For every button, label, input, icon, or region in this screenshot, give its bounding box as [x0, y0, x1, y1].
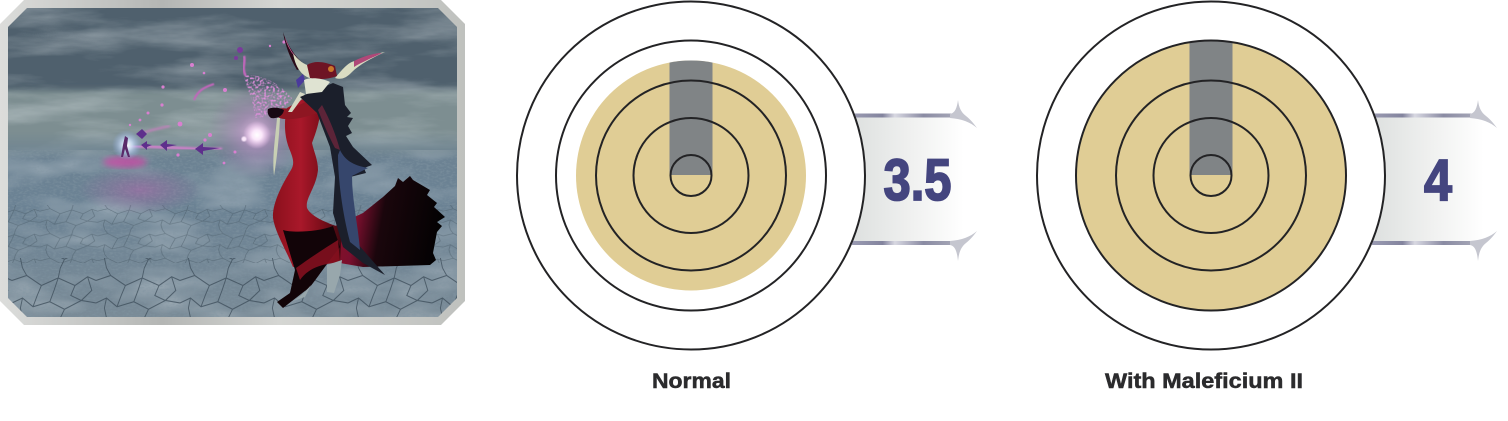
pink haze on ground — [96, 174, 184, 207]
game screenshot with metallic frame — [0, 0, 480, 325]
chart: normal range — [517, 2, 977, 393]
fur train — [333, 176, 445, 267]
bottom ornament — [852, 231, 977, 261]
tan range area — [1076, 40, 1346, 310]
chart: with Maleficium II — [1037, 2, 1497, 393]
distant target character — [103, 130, 147, 168]
value tab: normal — [848, 100, 977, 261]
feather cape — [300, 83, 385, 275]
white backing disc — [517, 2, 865, 350]
top ornament — [852, 100, 977, 128]
lower black hem — [277, 226, 340, 308]
value tab: with Maleficium II — [1368, 100, 1497, 261]
caption: With Maleficium II: With Maleficium II — [1105, 370, 1303, 393]
metallic octagonal frame — [0, 0, 465, 325]
grey blocked wedge — [670, 55, 712, 175]
stormy sky — [8, 8, 457, 154]
witch figure — [268, 32, 445, 308]
bottom ornament — [1372, 231, 1497, 261]
spell trail — [125, 40, 292, 164]
magic glow from the hand — [218, 98, 288, 165]
hand light flare — [244, 122, 270, 148]
caption: Normal: Normal — [652, 370, 731, 393]
top ornament — [1372, 100, 1497, 128]
tan range area — [576, 60, 806, 290]
legs — [327, 260, 342, 293]
hair — [273, 118, 280, 176]
headdress and horns — [283, 32, 302, 70]
value 3.5: 3.5 — [884, 148, 952, 213]
value 4: 4 — [1424, 148, 1452, 213]
concentric range rings — [1037, 2, 1385, 350]
grey blocked wedge — [1190, 35, 1232, 175]
arm — [278, 102, 310, 119]
red dress — [273, 98, 342, 267]
cracked ground — [8, 130, 457, 317]
concentric range rings — [517, 2, 865, 350]
white backing disc — [1037, 2, 1385, 350]
scene: witch casting a spell over a cracked desert — [0, 0, 480, 317]
